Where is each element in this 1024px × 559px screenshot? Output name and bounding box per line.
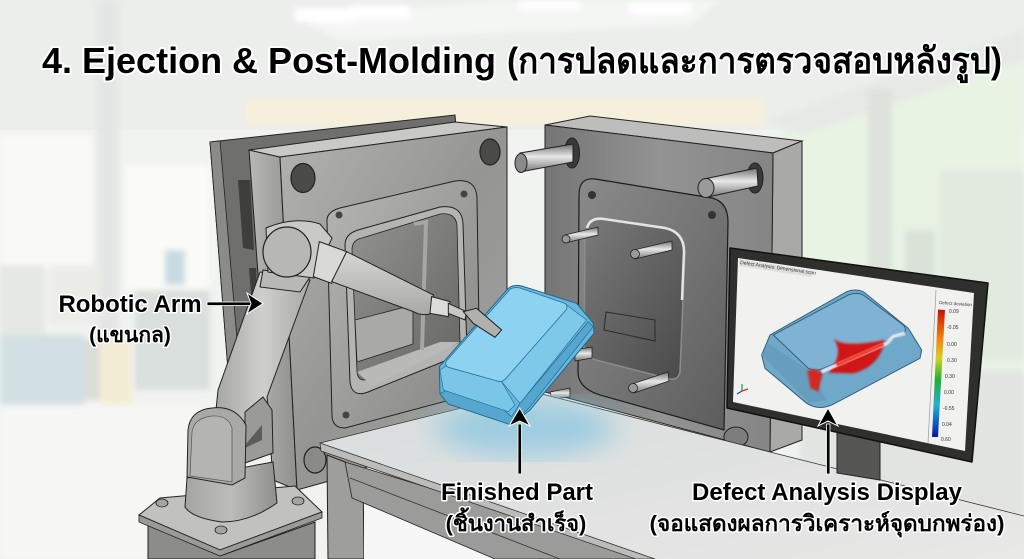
label: finished part — [441, 479, 593, 536]
color scale: 0.04 — [942, 422, 952, 428]
side face — [770, 141, 802, 452]
defect heat map part — [762, 290, 922, 407]
cavity opening — [345, 207, 467, 394]
pedestal — [148, 522, 315, 559]
color scale: -0.55 — [943, 406, 955, 412]
color scale: Defect deviation — [939, 300, 973, 307]
finished part — [439, 285, 594, 425]
screen heading text: Defect Analysis: Dimensional scan — [740, 260, 816, 277]
monitor — [727, 248, 988, 480]
space under table — [364, 500, 495, 559]
shoulder housing — [187, 408, 246, 485]
corner bores — [291, 139, 500, 473]
color scale: 0.00 — [947, 342, 957, 348]
table legs — [327, 455, 364, 559]
label: robotic arm: (แขนกล) — [89, 324, 171, 347]
monitor screen — [733, 258, 974, 451]
label: finished part: (ชิ้นงานสำเร็จ) — [446, 507, 586, 536]
arrow: robotic arm — [207, 293, 263, 314]
rear clamp plate — [210, 115, 456, 480]
label: robotic arm — [58, 291, 202, 347]
robotic arm — [139, 221, 502, 559]
color scale: 0.30 — [947, 358, 957, 364]
color scale — [928, 290, 973, 443]
front face — [545, 125, 773, 452]
left mold half — [210, 115, 507, 490]
shoulder clevis — [245, 397, 273, 463]
color scale: -0.05 — [947, 325, 959, 331]
block top edge — [249, 122, 507, 157]
elbow disc — [263, 227, 311, 277]
right mold half — [515, 116, 802, 452]
axis triad — [737, 384, 748, 394]
title: 4. Ejection & Post-Molding — [42, 40, 496, 81]
table apron — [345, 462, 660, 559]
block front face — [280, 127, 507, 490]
guide pins — [515, 138, 763, 198]
base cylinder — [185, 462, 277, 522]
label: finished part: Finished Part — [441, 479, 593, 506]
core insert plate — [578, 179, 728, 430]
label: robotic arm: Robotic Arm — [58, 291, 202, 318]
label: defect analysis display: Defect Analysis Display — [692, 479, 963, 506]
color scale: 0.30 — [945, 374, 955, 380]
elbow housing — [266, 221, 332, 278]
color scale: 0.00 — [944, 390, 954, 396]
label: defect analysis display — [650, 479, 1004, 538]
part glow on table — [435, 400, 615, 456]
cavity insert plate — [327, 181, 480, 428]
ejector pins — [550, 227, 672, 399]
table top — [320, 390, 1024, 559]
screen title — [739, 259, 812, 277]
monitor bezel — [727, 248, 988, 462]
color scale: 0.09 — [949, 309, 959, 315]
top edge — [545, 116, 802, 153]
forearm — [313, 242, 502, 337]
cavity floor and rib — [355, 305, 413, 362]
base plate — [139, 486, 322, 550]
label: defect analysis display: (จอแสดงผลการวิเคราะห์จุดบกพร่อง) — [650, 510, 1004, 538]
monitor stand — [837, 430, 880, 480]
arrow: finished part — [509, 408, 530, 474]
color scale: 0.60 — [941, 437, 951, 443]
block side face — [249, 150, 297, 490]
title — [42, 40, 1002, 84]
upper arm — [215, 272, 310, 440]
core block — [584, 219, 685, 379]
table — [320, 390, 1024, 559]
arrow: defect analysis display — [818, 408, 838, 474]
lower guide bore — [724, 427, 748, 447]
elbow collar — [260, 270, 310, 292]
